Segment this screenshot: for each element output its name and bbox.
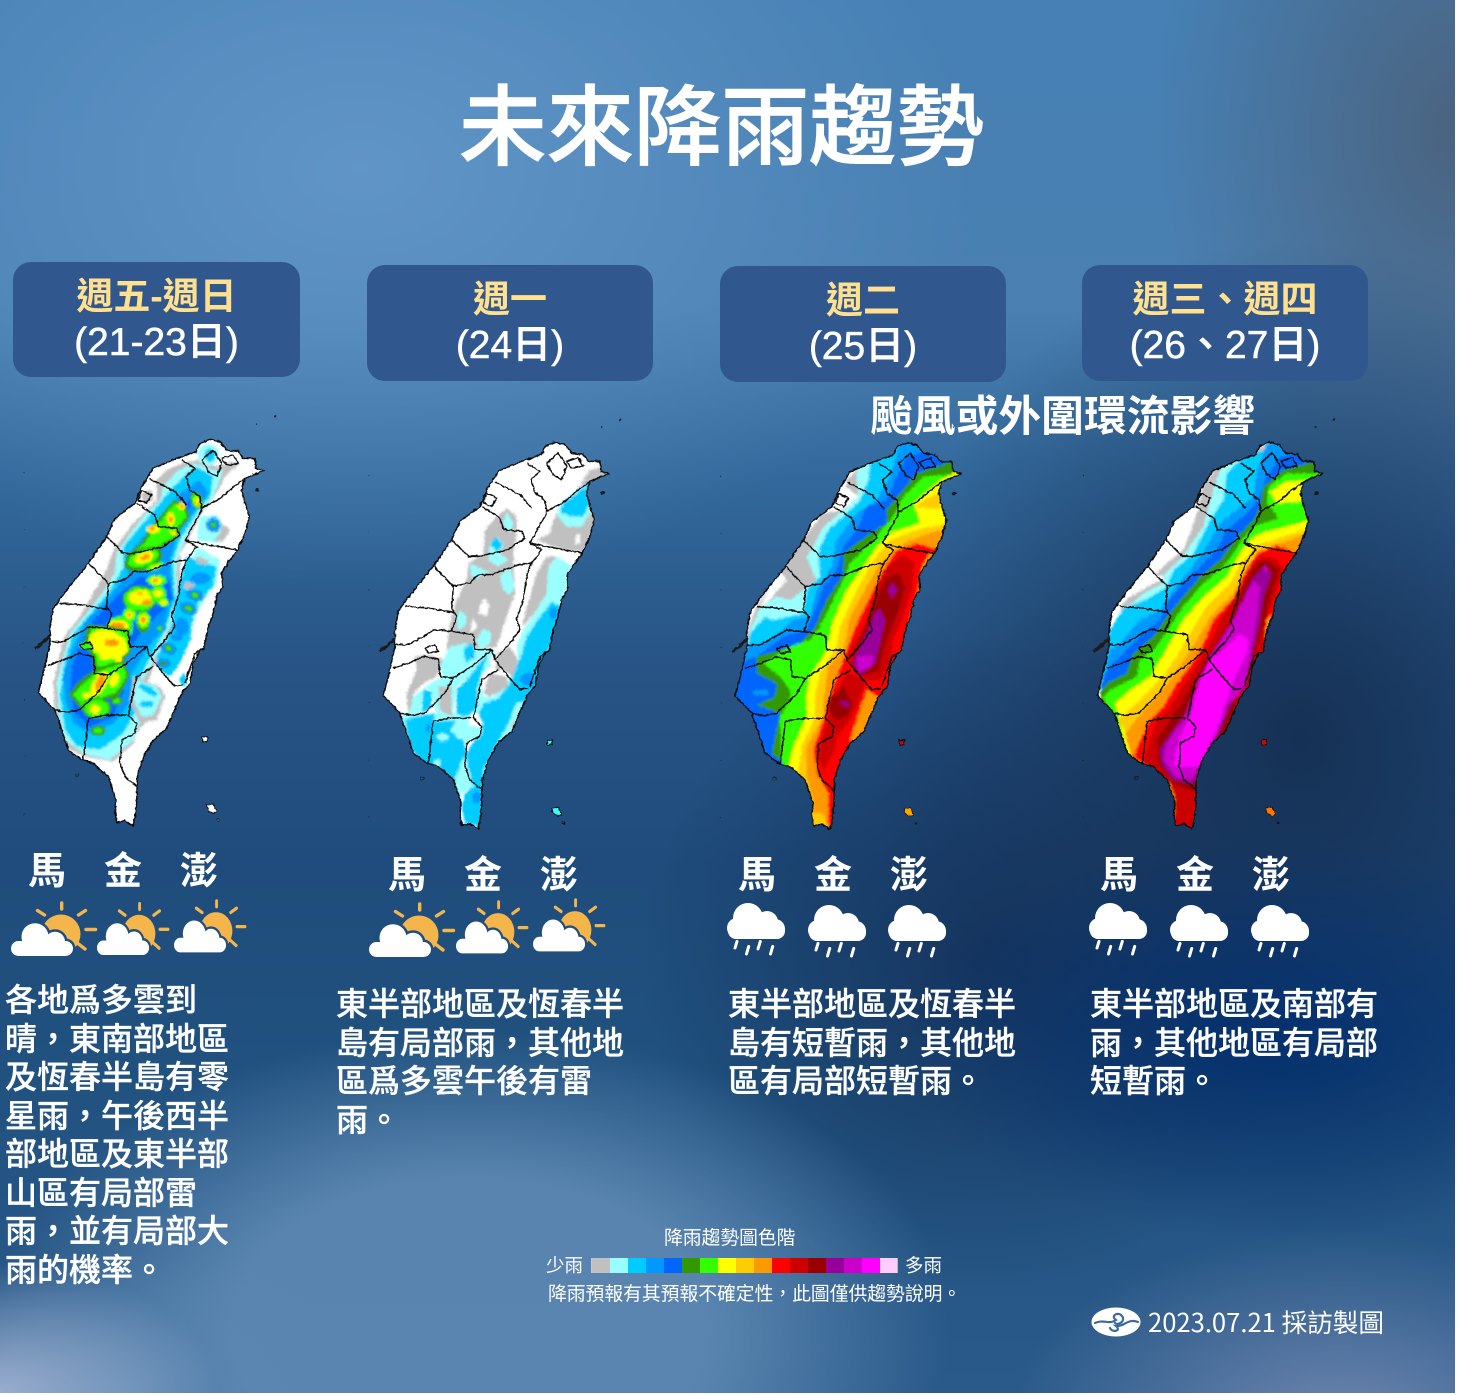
forecast text: Monday [336, 986, 624, 1138]
station labels: Wednesday column: 澎 [1252, 855, 1290, 897]
forecast text: Friday to Sunday: 及恆春半島有零 [5, 1059, 229, 1095]
panel header: Friday to Sunday: (21-23日) [74, 321, 239, 364]
map: Tuesday rainfall [720, 419, 972, 830]
station labels: Wednesday column [1100, 855, 1290, 897]
forecast text: Tuesday: 東半部地區及恆春半 [728, 986, 1016, 1022]
forecast text: Friday to Sunday [5, 982, 229, 1288]
forecast text: Friday to Sunday: 山區有局部雷 [5, 1174, 197, 1210]
map: Friday to Sunday rainfall [24, 416, 276, 826]
panel header: Monday: 週一 [473, 279, 547, 320]
forecast text: Wednesday and Thursday: 東半部地區及南部有 [1090, 986, 1378, 1022]
typhoon influence caption: 颱風或外圍環流影響 [870, 393, 1255, 441]
forecast text: Friday to Sunday: 部地區及東半部 [5, 1136, 229, 1172]
station labels: Tuesday column: 馬 [738, 855, 776, 897]
forecast text: Friday to Sunday: 雨的機率。 [5, 1252, 165, 1288]
forecast text: Monday: 雨。 [336, 1102, 400, 1138]
station labels: Monday column [388, 855, 578, 897]
forecast text: Tuesday: 區有局部短暫雨。 [728, 1063, 984, 1099]
forecast text: Friday to Sunday: 星雨，午後西半 [5, 1098, 229, 1134]
credit and date: 2023.07.21 採訪製圖 [1148, 1303, 1384, 1340]
legend label: much rain: 多雨 [905, 1255, 942, 1276]
icons: rain, Tuesday column [727, 903, 946, 956]
station labels: Monday column: 金 [464, 855, 502, 897]
forecast text: Wednesday and Thursday: 雨，其他地區有局部 [1090, 1024, 1378, 1060]
forecast text: Wednesday and Thursday: 短暫雨。 [1090, 1063, 1218, 1099]
forecast text: Tuesday [728, 986, 1016, 1099]
icons: partly cloudy, Friday to Sunday column [11, 901, 245, 956]
station labels: Monday column: 馬 [388, 855, 426, 897]
panel header: Wednesday and Thursday: 週三、週四 [1132, 279, 1318, 320]
colour scale bar [591, 1258, 898, 1273]
station labels: Monday column: 澎 [540, 855, 578, 897]
legend label: little rain: 少雨 [546, 1255, 583, 1276]
station labels: Wednesday column: 馬 [1100, 855, 1138, 897]
station labels: Friday to Sunday column: 金 [104, 851, 142, 893]
forecast text: Friday to Sunday: 各地爲多雲到 [5, 982, 197, 1018]
station labels: Tuesday column: 金 [814, 855, 852, 897]
panel header: Wednesday and Thursday [1082, 265, 1368, 381]
uncertainty note: 降雨預報有其預報不確定性，此圖僅供趨勢說明。 [548, 1283, 961, 1304]
station labels: Friday to Sunday column: 馬 [28, 851, 66, 893]
maps and weather icons [11, 415, 1336, 1336]
panel header: Monday [367, 265, 653, 381]
panel header: Monday: (24日) [456, 324, 564, 367]
forecast text: Friday to Sunday: 雨，並有局部大 [5, 1213, 229, 1249]
map: Monday rainfall [368, 418, 622, 830]
forecast text: Wednesday and Thursday [1090, 986, 1378, 1099]
logo [1092, 1308, 1140, 1336]
station labels: Tuesday column: 澎 [890, 855, 928, 897]
forecast text: Monday: 區爲多雲午後有雷 [336, 1063, 592, 1099]
icons: partly cloudy, Monday column [369, 900, 604, 957]
forecast text: Friday to Sunday: 晴，東南部地區 [5, 1020, 229, 1056]
panel header: Friday to Sunday: 週五-週日 [76, 276, 237, 317]
icons: rain, Wednesday column [1089, 903, 1309, 956]
title: 未來降雨趨勢 [459, 79, 984, 177]
legend title: 降雨趨勢圖色階 [664, 1227, 795, 1248]
station labels: Friday to Sunday column [28, 851, 218, 893]
forecast text: Monday: 島有局部雨，其他地 [336, 1024, 624, 1060]
map: Wednesday and Thursday rainfall [1082, 418, 1336, 830]
station labels: Friday to Sunday column: 澎 [180, 851, 218, 893]
panel header: Tuesday: (25日) [809, 325, 917, 368]
station labels: Tuesday column [738, 855, 928, 897]
panel header: Wednesday and Thursday: (26、27日) [1130, 324, 1320, 367]
station labels: Wednesday column: 金 [1176, 855, 1214, 897]
forecast text: Tuesday: 島有短暫雨，其他地 [728, 1024, 1016, 1060]
panel header: Friday to Sunday [13, 262, 300, 377]
panel header: Tuesday [720, 266, 1006, 382]
forecast text: Monday: 東半部地區及恆春半 [336, 986, 624, 1022]
panel header: Tuesday: 週二 [826, 280, 900, 321]
